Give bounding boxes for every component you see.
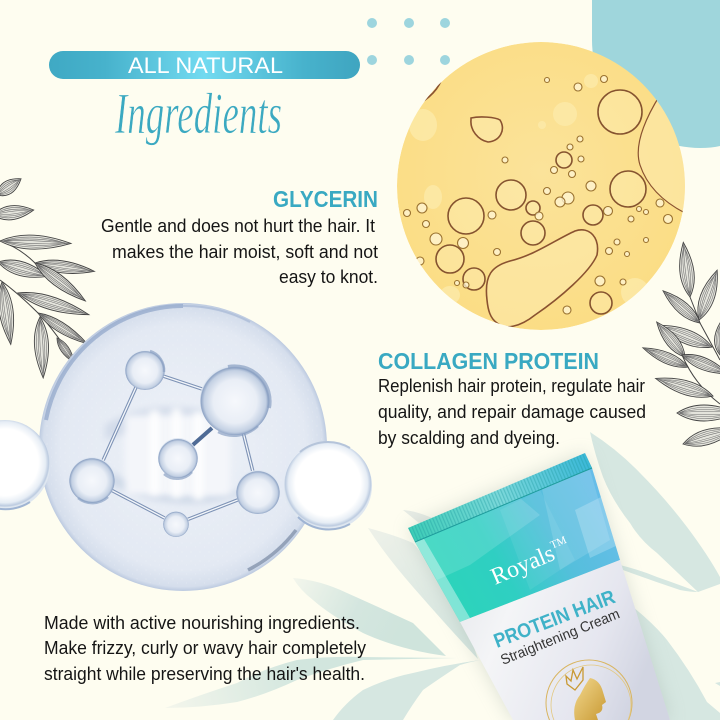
text: glycerin: Gentle and does not hurt the hair. It <box>101 216 375 236</box>
dna shading <box>104 406 236 505</box>
badge: ALL NATURAL <box>49 51 360 79</box>
dot grid <box>367 18 450 65</box>
pale drops <box>409 74 649 306</box>
text: description: straight while preserving the hair's health. <box>44 664 365 684</box>
sphere texture <box>43 307 323 587</box>
leaf sprig left <box>0 173 95 378</box>
text: description: Make frizzy, curly or wavy hair completely <box>44 638 366 658</box>
text: description: Made with active nourishing ingredients. <box>44 613 360 633</box>
badge: ALL NATURAL: ALL NATURAL <box>128 53 283 78</box>
gold logo <box>546 660 632 720</box>
text: glycerin: GLYCERIN <box>273 186 378 212</box>
text: glycerin: easy to knot. <box>279 267 378 287</box>
brand: Royals: TM <box>549 534 569 552</box>
glycerin oil circle <box>395 42 700 330</box>
text: glycerin: makes the hair moist, soft and not <box>112 242 378 262</box>
title: Ingredients: Ingredients <box>114 81 282 146</box>
text: collagen protein: COLLAGEN PROTEIN <box>378 348 599 374</box>
leaf sprig right <box>641 242 720 451</box>
product subtitle: Straightening Cream <box>499 606 622 669</box>
tube top section <box>415 468 620 622</box>
small bubbles <box>404 76 672 314</box>
large oil blobs <box>424 82 685 327</box>
rings <box>436 90 646 314</box>
brand: Royals: Royals <box>487 541 559 591</box>
pale background leaves <box>165 432 720 720</box>
text: glycerin <box>101 186 378 287</box>
rim highlight <box>46 306 183 420</box>
text: description <box>44 613 366 684</box>
product tube <box>408 453 670 720</box>
glass bubble left <box>0 420 50 510</box>
crimp band <box>408 453 592 542</box>
glass bubble right <box>284 442 372 530</box>
collagen sphere <box>39 303 327 591</box>
text: collagen protein: by scalding and dyeing. <box>378 428 560 448</box>
atom highlights <box>78 351 270 503</box>
product name: PROTEIN HAIR <box>491 586 619 653</box>
molecule atoms <box>69 350 280 537</box>
decorative teal shape top right <box>592 0 720 148</box>
text: collagen protein <box>378 348 646 448</box>
molecule bonds <box>92 370 258 524</box>
text: collagen protein: quality, and repair damage caused <box>378 402 646 422</box>
text: collagen protein: Replenish hair protein, regulate hair <box>378 376 645 396</box>
tube body <box>460 560 670 720</box>
